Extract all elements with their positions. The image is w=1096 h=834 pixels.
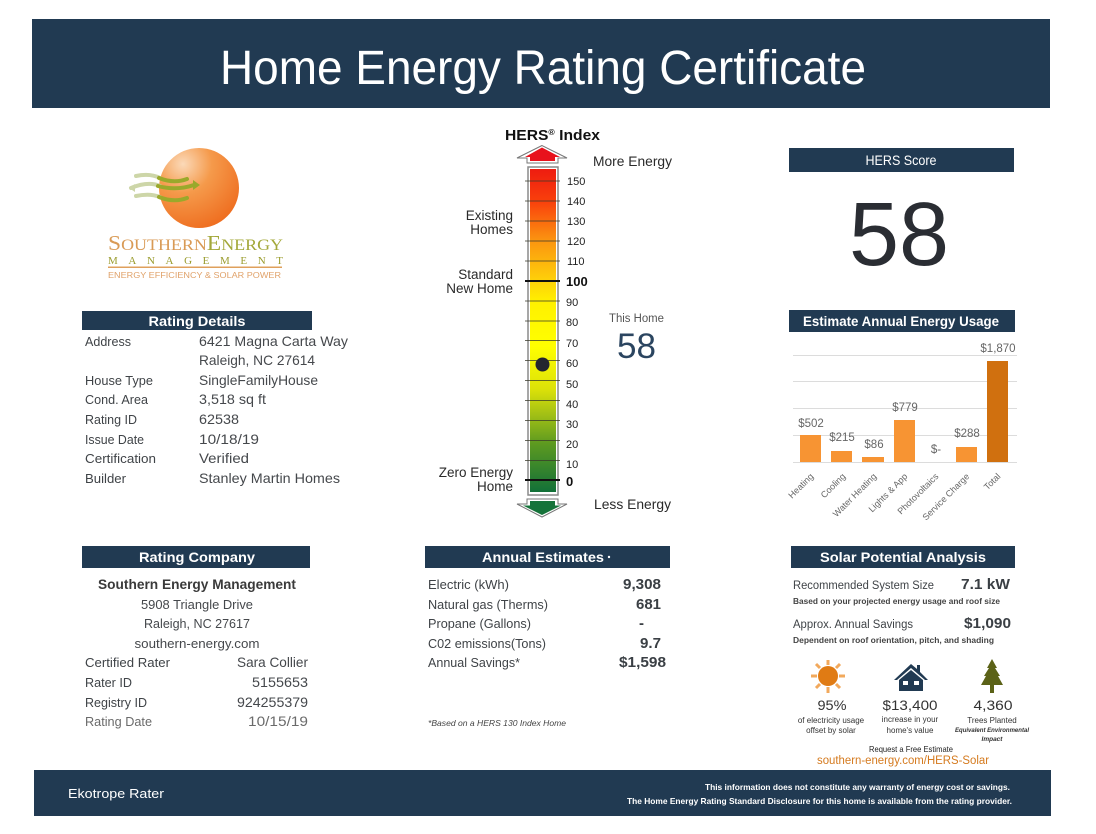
- arrow: more energy: [517, 146, 567, 163]
- heading: HERS score: HERS Score: [866, 153, 936, 168]
- stat: trees planted: [955, 697, 1029, 743]
- bar chart: $1,870: [980, 343, 1016, 355]
- stat: home value: [882, 697, 939, 735]
- annotation labels: Homes: [470, 222, 513, 237]
- heading: solar potential: Solar Potential Analysis: [820, 549, 986, 565]
- panel: solar potential analysis: $1,090: [964, 615, 1011, 632]
- heading: energy usage: [789, 310, 1015, 332]
- thermometer tube: [528, 167, 558, 495]
- panel: rating company: Raleigh, NC 27617: [144, 616, 250, 631]
- scale labels: 100: [566, 274, 588, 289]
- logo: Southern Energy Management: MANAGEMENT: [108, 255, 283, 267]
- bar chart: Cooling: [819, 471, 847, 500]
- panel: rating details: 62538: [199, 411, 239, 427]
- scale labels: 40: [566, 399, 578, 411]
- panel: annual estimates: C02 emissions(Tons): [428, 636, 546, 651]
- panel: annual estimates: 9.7: [640, 635, 661, 652]
- callout: this home score: This Home: [609, 313, 664, 325]
- call to action: Request a Free Estimate: [869, 744, 953, 754]
- panel: rating details: Stanley Martin Homes: [199, 470, 340, 486]
- scale labels: 60: [566, 358, 578, 370]
- annotation labels: [439, 154, 672, 512]
- scale labels: 70: [566, 338, 578, 350]
- logo: Southern Energy Management: SOUTHERN ENERGY: [108, 231, 283, 255]
- panel: estimate annual energy usage: [786, 310, 1017, 522]
- stat: electricity offset: offset by solar: [806, 726, 856, 735]
- heading: rating company: Rating Company: [139, 549, 255, 565]
- stat: trees planted: Impact: [982, 736, 1003, 743]
- scale labels: 0: [566, 474, 573, 489]
- heading: rating details: Rating Details: [148, 313, 246, 329]
- panel: rating details: Issue Date: [85, 432, 144, 447]
- panel: rating details: House Type: [85, 373, 153, 388]
- annotation labels: Zero Energy: [439, 465, 513, 480]
- marker: this home: [536, 358, 550, 372]
- scale labels: 20: [566, 439, 578, 451]
- panel: rating company: Registry ID: [85, 695, 147, 710]
- stat: electricity offset: of electricity usage: [798, 716, 865, 725]
- bar chart: Photovoltaics: [895, 471, 941, 516]
- heading: annual estimates: [425, 546, 670, 568]
- scale labels: 50: [566, 379, 578, 391]
- bar chart: $215: [829, 432, 855, 444]
- title banner: Home Energy Rating Certificate: [220, 42, 866, 95]
- panel: rating company: Certified Rater: [85, 655, 171, 670]
- panel: rating company: southern-energy.com: [134, 636, 260, 651]
- bar chart: [786, 343, 1017, 522]
- heading: annual estimates: Annual Estimates: [482, 549, 604, 565]
- arrow: less energy: [517, 499, 567, 517]
- scale labels: 130: [567, 216, 585, 228]
- heading: solar potential: [791, 546, 1015, 568]
- bar chart: $779: [892, 402, 918, 414]
- panel: annual estimates: Annual Savings*: [428, 655, 520, 670]
- bar chart: $-: [931, 444, 941, 456]
- panel: rating company: 924255379: [237, 694, 308, 710]
- panel: annual estimates: *Based on a HERS 130 Index Home: [428, 718, 566, 728]
- annotation labels: More Energy: [593, 154, 672, 169]
- panel: rating details: Cond. Area: [85, 392, 149, 407]
- call to action: [817, 744, 989, 767]
- panel: annual estimates: Natural gas (Therms): [428, 597, 548, 612]
- footer banner: Ekotrope Rater: [68, 786, 165, 801]
- call to action: southern-energy.com/HERS-Solar: [817, 755, 989, 767]
- panel: rating company: Sara Collier: [237, 654, 308, 670]
- panel: annual estimates: [425, 546, 670, 728]
- logo: Southern Energy Management: ENERGY EFFICIENCY & SOLAR POWER: [108, 270, 281, 280]
- heading: rating details: [82, 311, 312, 330]
- icon: sun: [811, 660, 845, 693]
- panel: rating details: [82, 311, 348, 486]
- callout: this home score: [609, 313, 664, 366]
- panel: annual estimates: -: [639, 615, 644, 632]
- panel: annual estimates: Electric (kWh): [428, 577, 509, 592]
- footer banner: [34, 770, 1051, 816]
- stat: home value: increase in your: [882, 715, 939, 724]
- footer banner: The Home Energy Rating Standard Disclosure for this home is available from the rating provider.: [627, 796, 1012, 806]
- panel: rating details: SingleFamilyHouse: [199, 372, 318, 388]
- icon: tree: [981, 659, 1003, 693]
- scale labels: [566, 176, 588, 489]
- panel: HERS score: [789, 148, 1014, 285]
- score value: 58: [849, 185, 949, 285]
- panel: rating details: Rating ID: [85, 412, 137, 427]
- panel: solar potential analysis: Approx. Annual Savings: [793, 619, 913, 631]
- annotation labels: Home: [477, 479, 513, 494]
- panel: solar potential analysis: Recommended System Size: [793, 580, 934, 592]
- annotation labels: Less Energy: [594, 497, 671, 512]
- chart: HERS index thermometer: [439, 128, 672, 517]
- scale labels: 120: [567, 236, 585, 248]
- stat: electricity offset: [798, 697, 865, 735]
- stat: home value: $13,400: [882, 697, 938, 713]
- scale labels: 110: [567, 256, 585, 268]
- bar chart: $86: [864, 439, 884, 451]
- logo: Southern Energy Management: [108, 148, 283, 280]
- scale labels: 80: [566, 317, 578, 329]
- stat: electricity offset: 95%: [818, 697, 846, 713]
- panel: annual estimates: $1,598: [619, 654, 666, 671]
- panel: rating details: Address: [85, 334, 131, 349]
- panel: solar potential analysis: Dependent on roof orientation, pitch, and shading: [793, 635, 994, 645]
- stat: trees planted: Trees Planted: [967, 716, 1017, 725]
- bar chart: $502: [798, 418, 824, 430]
- panel: rating details: Raleigh, NC 27614: [199, 352, 315, 368]
- panel: rating company: 5908 Triangle Drive: [141, 597, 253, 612]
- bar chart: Service Charge: [920, 471, 971, 522]
- panel: rating details: 6421 Magna Carta Way: [199, 333, 348, 349]
- scale labels: 10: [566, 459, 578, 471]
- stat: trees planted: 4,360: [974, 697, 1013, 713]
- heading: HERS score: [789, 148, 1014, 172]
- scale labels: 90: [566, 297, 578, 309]
- heading: rating company: [82, 546, 310, 568]
- annotation labels: Existing: [466, 208, 513, 223]
- scale labels: 30: [566, 419, 578, 431]
- heading: HERS index: ®: [548, 128, 555, 137]
- panel: rating company: Rater ID: [85, 675, 132, 690]
- scale ticks: [525, 181, 560, 480]
- annotation labels: Standard: [458, 267, 513, 282]
- panel: annual estimates: Propane (Gallons): [428, 616, 531, 631]
- panel: rating details: Builder: [85, 471, 127, 486]
- bar chart: Water Heating: [831, 471, 878, 519]
- panel: annual estimates: 9,308: [623, 576, 661, 593]
- panel: rating details: Certification: [85, 451, 156, 466]
- stat: trees planted: Equivalent Environmental: [955, 727, 1029, 734]
- panel: rating company: [82, 546, 310, 729]
- bar chart: Total: [982, 471, 1002, 492]
- panel: rating company: 10/15/19: [248, 713, 308, 729]
- bar chart: Lights & App: [867, 471, 909, 514]
- panel: rating company: Rating Date: [85, 714, 152, 729]
- panel: rating details: 3,518 sq ft: [199, 391, 266, 407]
- panel: rating details: 10/18/19: [199, 431, 259, 447]
- bar chart: $288: [954, 428, 980, 440]
- panel: solar potential analysis: 7.1 kW: [961, 576, 1011, 593]
- stat: home value: home's value: [887, 726, 934, 735]
- heading: HERS index: HERS: [505, 128, 545, 144]
- scale labels: 140: [567, 196, 585, 208]
- panel: annual estimates: 681: [636, 596, 661, 613]
- footer banner: This information does not constitute any warranty of energy cost or savings.: [705, 782, 1010, 792]
- icon: house: [894, 664, 928, 691]
- annotation labels: New Home: [446, 281, 513, 296]
- panel: solar potential analysis: [791, 546, 1029, 767]
- panel: rating company: 5155653: [252, 674, 308, 690]
- scale labels: 150: [567, 176, 585, 188]
- callout: this home score: 58: [617, 327, 656, 366]
- title banner: [32, 19, 1050, 108]
- heading: energy usage: Estimate Annual Energy Usage: [803, 314, 999, 329]
- panel: rating details: Verified: [199, 450, 249, 466]
- heading: HERS index: Index: [555, 128, 600, 144]
- panel: solar potential analysis: Based on your projected energy usage and roof size: [793, 596, 1000, 606]
- panel: rating company: Southern Energy Management: [98, 576, 296, 592]
- bar chart: Heating: [786, 471, 815, 500]
